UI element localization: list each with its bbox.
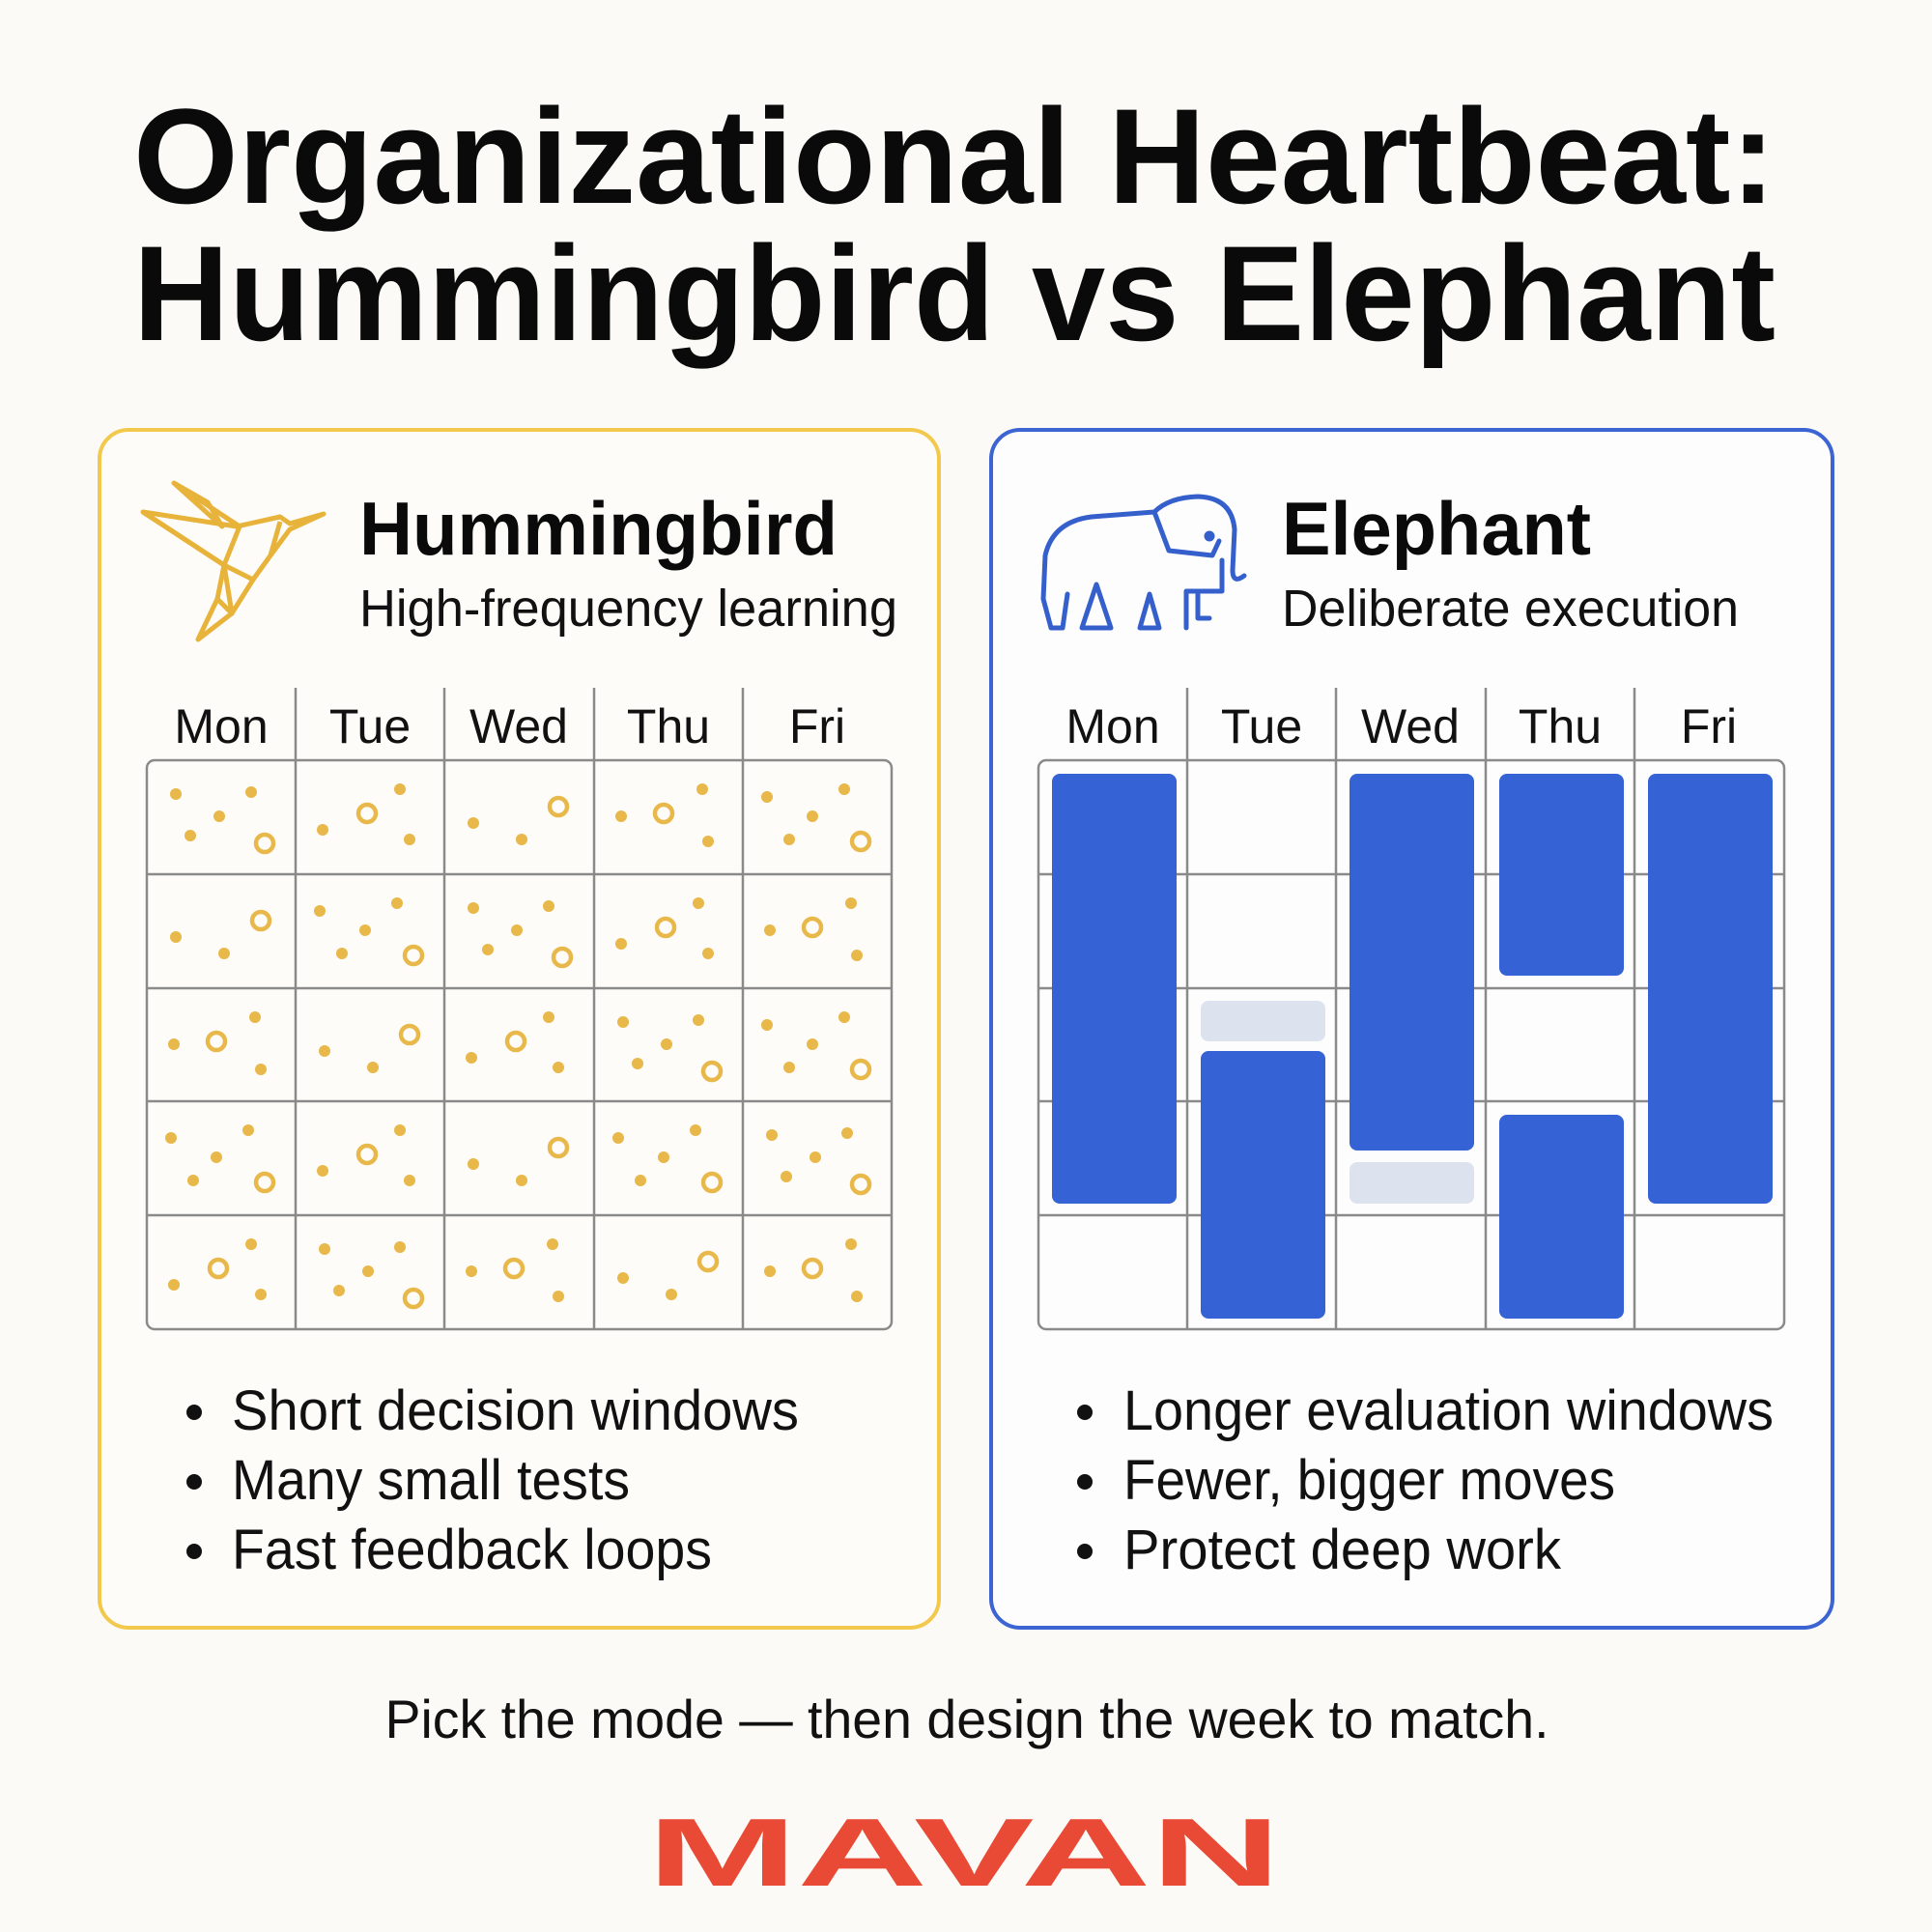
subheading: Deliberate execution [1282, 580, 1739, 638]
icon: elephant [1043, 497, 1244, 628]
subheading: High-frequency learning [359, 580, 897, 638]
icon: hummingbird [143, 483, 324, 639]
calendar: hummingbird: Wed [469, 699, 568, 753]
bullets: elephant: Fewer, bigger moves [1123, 1449, 1615, 1512]
calendar: hummingbird: Tue [329, 699, 411, 753]
calendar: elephant: Thu [1519, 699, 1602, 753]
panel: hummingbird [99, 430, 939, 1628]
calendar: hummingbird: Mon [174, 699, 269, 753]
blocks [1052, 774, 1773, 1319]
bullets: hummingbird: Fast feedback loops [232, 1519, 712, 1581]
calendar: elephant: Wed [1361, 699, 1460, 753]
footer text: Pick the mode — then design the week to match. [384, 1689, 1549, 1749]
heading: Hummingbird: Hummingbird [359, 486, 838, 571]
title: Hummingbird vs Elephant [133, 217, 1776, 369]
title: Organizational Heartbeat: [133, 80, 1776, 232]
bullets: hummingbird: Many small tests [232, 1449, 630, 1512]
bullets: hummingbird [186, 1379, 799, 1581]
heading: Elephant: Elephant [1282, 486, 1591, 571]
calendar: elephant [1038, 688, 1784, 1329]
title [133, 80, 1776, 369]
calendar: hummingbird: Thu [627, 699, 710, 753]
bullets: elephant [1077, 1379, 1774, 1581]
calendar: elephant: Tue [1221, 699, 1302, 753]
calendar: elephant: Mon [1065, 699, 1160, 753]
bullets: hummingbird: Short decision windows [232, 1379, 799, 1442]
bullets: elephant: Protect deep work [1123, 1519, 1562, 1581]
bullets: elephant: Longer evaluation windows [1123, 1379, 1774, 1442]
calendar: hummingbird: Fri [789, 699, 845, 753]
panel: elephant [991, 430, 1833, 1628]
calendar: hummingbird [147, 688, 892, 1329]
logo: MAVAN: MAVAN [647, 1799, 1281, 1907]
calendar: elephant: Fri [1681, 699, 1737, 753]
